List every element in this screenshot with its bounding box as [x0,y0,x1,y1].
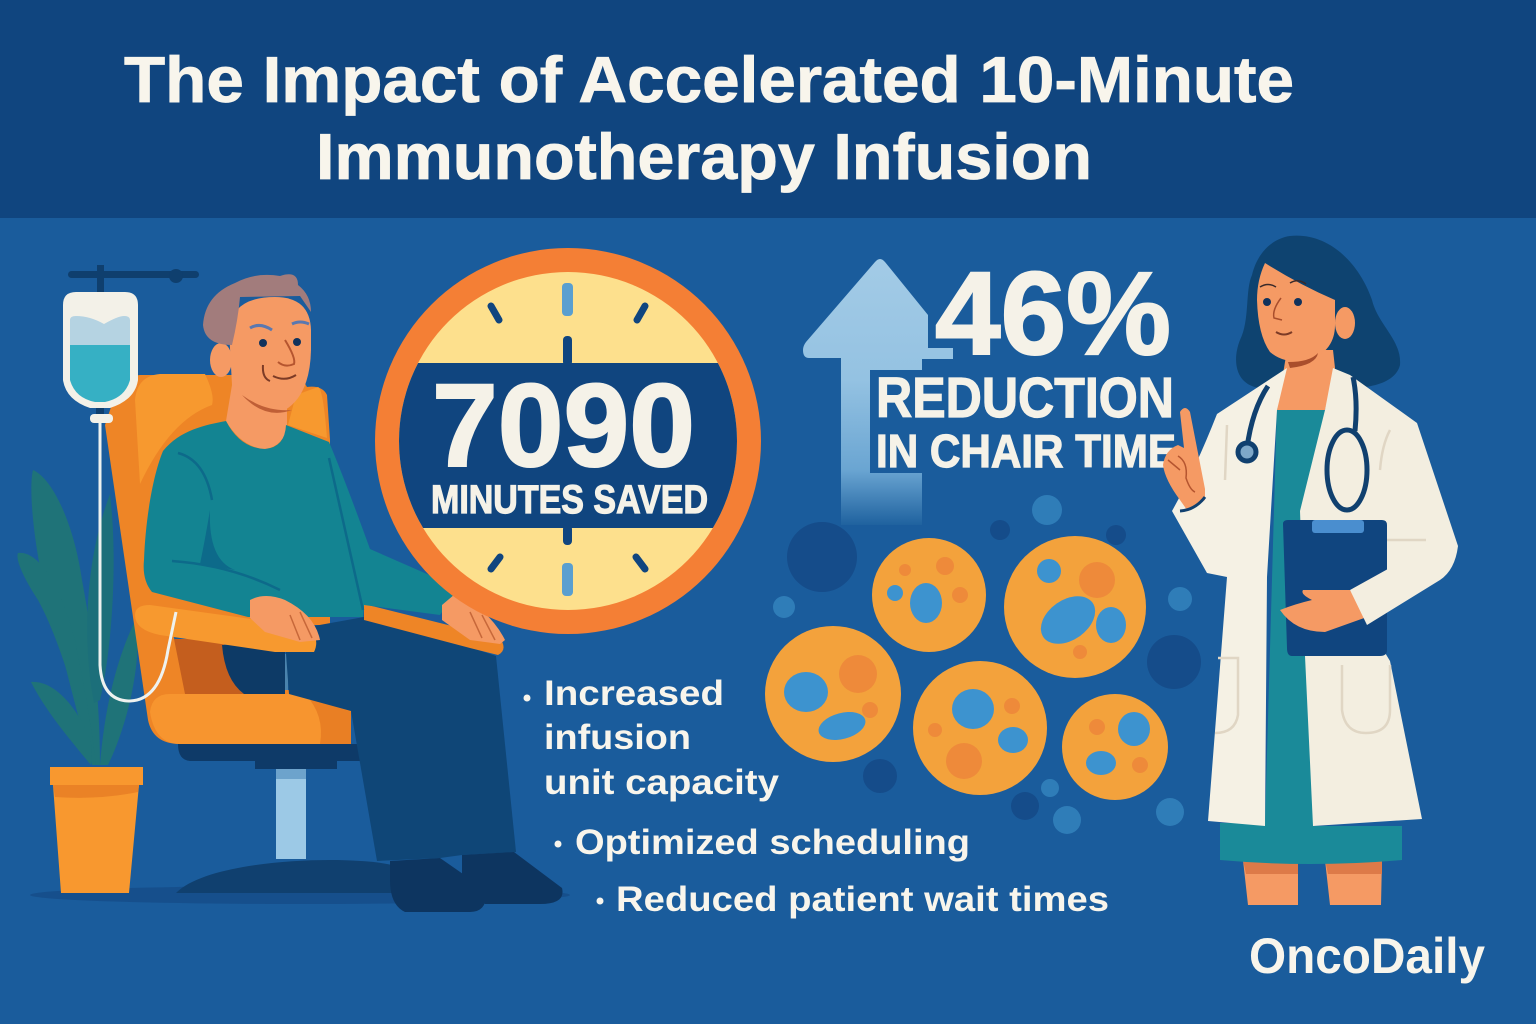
under-arm shade [174,639,244,694]
bullet list: unit capacity [544,763,780,802]
patient hands [250,594,505,644]
icon: IV drip [63,265,199,701]
icon: patient [135,274,563,912]
title: Immunotherapy Infusion [316,120,1092,193]
chair back [105,375,351,744]
cell 3 [765,626,901,762]
chair highlight [135,374,327,484]
bullet list: infusion [544,718,691,757]
bullet list: Increased [544,674,724,713]
cell 1 [872,538,986,652]
doctor legs [1243,860,1382,905]
doctor hand on clipboard [1280,590,1367,632]
patient hair [203,274,311,345]
doctor neck shadow [1288,353,1318,368]
sweater folds [172,453,363,610]
bullet list [524,674,1109,919]
doctor hair [1236,236,1400,388]
doctor coat right [1300,368,1458,826]
cell 4 [913,661,1047,795]
header band [0,0,1536,218]
background particles [773,495,1201,834]
doctor features [1260,281,1306,334]
doctor face [1257,263,1335,361]
chair seat base [178,744,440,769]
clock number: 7090 [432,360,695,492]
statistic label: IN CHAIR TIME [876,425,1176,477]
bullet list: Optimized scheduling [575,823,970,862]
cell 2 [1004,536,1146,678]
cell 5 [1062,694,1168,800]
cancer cells [765,536,1168,800]
clipboard [1283,520,1387,656]
doctor ear [1335,307,1355,339]
right armrest [364,604,504,655]
clock [375,248,761,634]
doctor coat sleeve over hand [1350,540,1458,625]
doctor pointing hand [1163,408,1205,510]
icon: doctor [1163,236,1458,905]
icon: chair [105,374,440,893]
chair post [276,769,306,859]
bullet list: Reduced patient wait times [616,880,1109,919]
stethoscope [1238,377,1367,510]
doctor coat left [1172,368,1287,826]
statistic label [876,366,1176,477]
patient sweater [144,421,459,617]
logo: OncoDaily: OncoDaily [1249,928,1485,984]
patient legs [285,617,516,861]
doctor dress [1220,405,1402,864]
patient ear [210,343,232,377]
icon: up arrow [803,259,953,525]
floor shadow [30,886,570,904]
doctor coat details [1215,425,1426,733]
patient neck [226,385,287,449]
doctor neck [1277,350,1335,410]
title: The Impact of Accelerated 10-Minute [124,43,1294,116]
left armrest [135,605,316,652]
statistic: 46%: 46% [935,248,1171,380]
seat cushion [150,694,351,744]
patient features [250,322,309,381]
icon: plant [17,470,143,893]
chair base [176,860,392,893]
statistic label: REDUCTION [876,366,1174,430]
title [124,43,1294,193]
patient face [229,297,311,410]
patient shoes [390,852,563,912]
patient neck shadow [242,395,292,413]
clock label: MINUTES SAVED [431,478,708,522]
